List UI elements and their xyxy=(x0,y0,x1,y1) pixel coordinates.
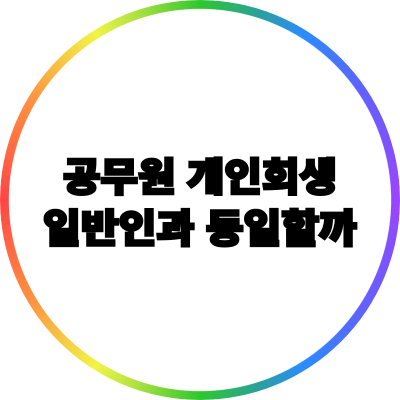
title line 1: 공무원 개인회생 xyxy=(63,157,337,200)
title line 2: 일반인과 동일할까 xyxy=(43,208,357,252)
